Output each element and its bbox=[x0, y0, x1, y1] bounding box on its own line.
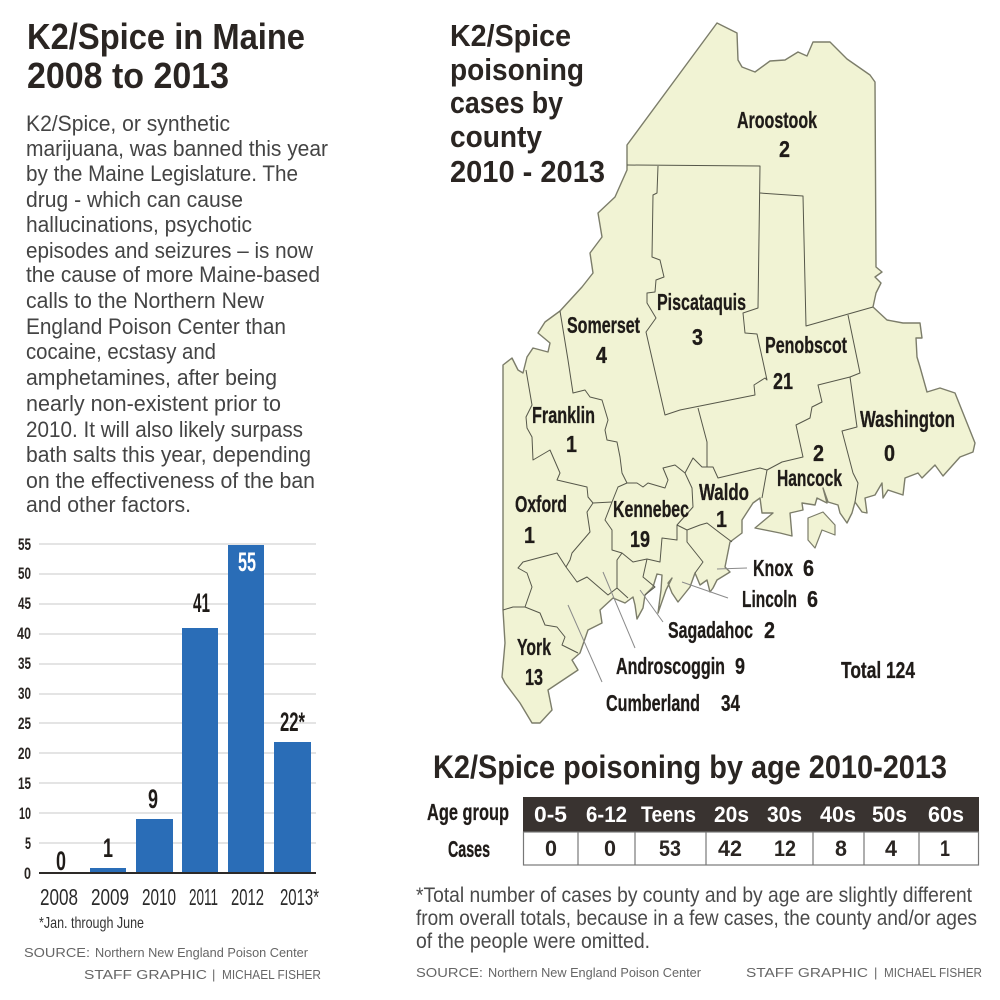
table: cases by age group: 53 bbox=[659, 836, 681, 861]
label: Sagadahoc: 2 bbox=[764, 617, 775, 643]
y axis labels: 10 bbox=[19, 804, 31, 823]
y axis labels bbox=[17, 535, 31, 883]
label: Aroostook: Aroostook bbox=[737, 107, 817, 133]
credit: right: | bbox=[874, 965, 877, 980]
label: Androscoggin: 9 bbox=[735, 653, 745, 679]
text block: introduction: hallucinations, psychotic bbox=[26, 212, 252, 237]
text block: introduction: calls to the Northern New bbox=[26, 288, 264, 313]
text block: introduction: marijuana, was banned this year bbox=[26, 136, 328, 161]
credit: left bbox=[84, 967, 321, 982]
text block: introduction: bath salts this year, depending bbox=[26, 442, 311, 467]
text block: introduction: K2/Spice, or synthetic bbox=[26, 111, 230, 136]
county borders bbox=[503, 165, 873, 653]
title: K2/Spice in Maine 2008 to 2013: 2008 to 2013 bbox=[27, 55, 229, 96]
label: Kennebec: 19 bbox=[630, 526, 650, 552]
table: cases by age group: Teens bbox=[641, 802, 696, 827]
label: Kennebec bbox=[613, 496, 689, 552]
text block: introduction: drug - which can cause bbox=[26, 187, 243, 212]
label: Penobscot bbox=[765, 332, 847, 394]
title: poisoning cases by county: cases by bbox=[450, 85, 564, 120]
table: cases by age group: 50s bbox=[872, 802, 907, 827]
title: poisoning cases by county: K2/Spice bbox=[450, 18, 571, 53]
label: Penobscot: Penobscot bbox=[765, 332, 847, 358]
text block: introduction: by the Maine Legislature. The bbox=[26, 161, 298, 186]
text block: introduction: episodes and seizures – is now bbox=[26, 238, 313, 263]
y axis labels: 20 bbox=[18, 744, 31, 763]
label: Hancock bbox=[777, 440, 842, 491]
table: cases by age group: 20s bbox=[714, 802, 749, 827]
x axis year labels bbox=[40, 884, 319, 910]
label: Piscataquis: 3 bbox=[692, 324, 703, 350]
credit: right bbox=[746, 965, 982, 980]
label: York bbox=[517, 634, 551, 690]
label: Androscoggin: Androscoggin bbox=[616, 653, 725, 679]
label: Waldo bbox=[699, 479, 749, 532]
label: Hancock: Hancock bbox=[777, 465, 842, 491]
island bbox=[808, 512, 835, 548]
text block: introduction: 2010. It will also likely surpass bbox=[26, 417, 303, 442]
table: cases by age group: 6-12 bbox=[586, 802, 627, 827]
label: Oxford: Oxford bbox=[515, 491, 567, 517]
y axis labels: 0 bbox=[24, 864, 31, 883]
table: cases by age group: 40s bbox=[820, 802, 856, 827]
label: Aroostook bbox=[737, 107, 817, 162]
label: York: 13 bbox=[525, 664, 543, 690]
table: cases by age group: 0-5 bbox=[534, 802, 567, 827]
label: Franklin: 1 bbox=[566, 431, 577, 457]
bar value labels: 55 bbox=[238, 547, 256, 577]
label: Washington bbox=[860, 406, 955, 466]
label: Lincoln: 6 bbox=[807, 586, 818, 612]
label: Waldo: 1 bbox=[716, 506, 727, 532]
label: Somerset bbox=[567, 312, 640, 368]
label: Franklin: Franklin bbox=[532, 402, 595, 428]
map outline bbox=[502, 23, 975, 723]
text block: introduction: amphetamines, after being bbox=[26, 365, 277, 390]
text block: introduction: and other factors. bbox=[26, 492, 191, 517]
source line: left: SOURCE: bbox=[24, 945, 90, 960]
label: Total: Total 124 bbox=[841, 657, 915, 683]
title: K2/Spice in Maine 2008 to 2013 bbox=[27, 16, 305, 96]
credit: right: MICHAEL FISHER bbox=[884, 965, 982, 980]
title: poisoning cases by county: poisoning bbox=[450, 52, 584, 87]
label: Knox: 6 bbox=[803, 555, 814, 581]
bar value labels: 22* bbox=[280, 707, 305, 737]
source line: left: Northern New England Poison Center bbox=[95, 945, 309, 960]
label: Lincoln: Lincoln bbox=[742, 586, 797, 612]
text block: introduction: nearly non-existent prior to bbox=[26, 391, 281, 416]
label: Washington: Washington bbox=[860, 406, 955, 432]
label: Piscataquis bbox=[657, 289, 746, 350]
bar value labels: 1 bbox=[103, 833, 113, 863]
label: Waldo: Waldo bbox=[699, 479, 749, 505]
x axis year labels: 2011 bbox=[189, 884, 218, 910]
text block: introduction: on the effectiveness of the ban bbox=[26, 468, 315, 493]
bar value labels: 41 bbox=[193, 588, 210, 618]
table: cases by age group: 42 bbox=[718, 836, 742, 861]
label: Cumberland: 34 bbox=[721, 690, 740, 716]
y axis labels: 40 bbox=[17, 624, 31, 643]
text block: introduction bbox=[26, 111, 328, 517]
label: Somerset: 4 bbox=[596, 342, 607, 368]
source line: right: Northern New England Poison Center bbox=[488, 965, 702, 980]
table row labels bbox=[427, 799, 509, 862]
county labels bbox=[515, 107, 955, 716]
y axis labels: 5 bbox=[25, 834, 31, 853]
credit: left: STAFF GRAPHIC bbox=[84, 967, 207, 982]
label: Knox: Knox bbox=[753, 555, 793, 581]
table values row bbox=[524, 832, 978, 865]
x axis year labels: 2013* bbox=[280, 884, 319, 910]
table: cases by age group: 4 bbox=[885, 836, 898, 861]
credit: left: MICHAEL FISHER bbox=[222, 967, 321, 982]
map: Maine counties bbox=[502, 23, 975, 723]
table: cases by age group: 0 bbox=[545, 836, 557, 861]
label: York: York bbox=[517, 634, 551, 660]
y axis labels: 35 bbox=[18, 654, 31, 673]
table row labels: Age group bbox=[427, 799, 509, 825]
y axis labels: 30 bbox=[18, 684, 31, 703]
source line: right: SOURCE: bbox=[416, 965, 483, 980]
title: poisoning cases by county: county bbox=[450, 119, 543, 154]
label: Oxford: 1 bbox=[524, 522, 535, 548]
title: poisoning cases by county: 2010 - 2013 bbox=[450, 154, 605, 189]
x axis year labels: 2010 bbox=[142, 884, 176, 910]
label: Cumberland: Cumberland bbox=[606, 690, 700, 716]
x axis year labels: 2009 bbox=[91, 884, 129, 910]
label: Hancock: 2 bbox=[813, 440, 824, 466]
label: Sagadahoc: Sagadahoc bbox=[668, 617, 753, 643]
bar value labels bbox=[56, 547, 305, 876]
y axis labels: 50 bbox=[18, 564, 31, 583]
y axis labels: 55 bbox=[18, 535, 31, 554]
label: Penobscot: 21 bbox=[773, 368, 793, 394]
text block: introduction: England Poison Center than bbox=[26, 314, 286, 339]
table: cases by age group: 0 bbox=[604, 836, 616, 861]
bar value labels: 0 bbox=[56, 846, 66, 876]
title: poisoning cases by county bbox=[450, 18, 605, 189]
label: Aroostook: 2 bbox=[779, 136, 790, 162]
label: Somerset: Somerset bbox=[567, 312, 640, 338]
table: cases by age group: 60s bbox=[928, 802, 964, 827]
text block: introduction: the cause of more Maine-based bbox=[26, 262, 320, 287]
table: cases by age group: 1 bbox=[940, 836, 950, 861]
credit: left: | bbox=[212, 967, 215, 982]
label: Kennebec: Kennebec bbox=[613, 496, 689, 522]
chart footnote: *Jan. through June bbox=[39, 915, 144, 932]
label: Oxford bbox=[515, 491, 567, 548]
bars bbox=[90, 545, 311, 873]
y axis labels: 45 bbox=[18, 594, 31, 613]
bar chart: cases per year bbox=[17, 535, 319, 932]
label: Franklin bbox=[532, 402, 595, 457]
table: cases by age group bbox=[427, 797, 979, 865]
title: K2/Spice in Maine 2008 to 2013: K2/Spice in Maine bbox=[27, 16, 305, 57]
leader lines bbox=[568, 568, 747, 682]
table header bbox=[523, 797, 979, 832]
footnote bbox=[416, 884, 977, 953]
table: cases by age group: 8 bbox=[835, 836, 847, 861]
footnote: of the people were omitted. bbox=[416, 930, 650, 953]
bar value labels: 9 bbox=[148, 784, 158, 814]
text block: introduction: cocaine, ecstasy and bbox=[26, 339, 216, 364]
table: cases by age group: 12 bbox=[774, 836, 796, 861]
x axis year labels: 2008 bbox=[40, 884, 78, 910]
credit: right: STAFF GRAPHIC bbox=[746, 965, 868, 980]
label: Washington: 0 bbox=[884, 440, 895, 466]
table: cases by age group: 30s bbox=[767, 802, 802, 827]
table row labels: Cases bbox=[448, 836, 490, 862]
label: Piscataquis: Piscataquis bbox=[657, 289, 746, 315]
x axis year labels: 2012 bbox=[231, 884, 264, 910]
heading: poisoning by age: K2/Spice poisoning by age 2010-2013 bbox=[433, 749, 947, 785]
y axis labels: 25 bbox=[18, 714, 31, 733]
y axis labels: 15 bbox=[18, 774, 31, 793]
